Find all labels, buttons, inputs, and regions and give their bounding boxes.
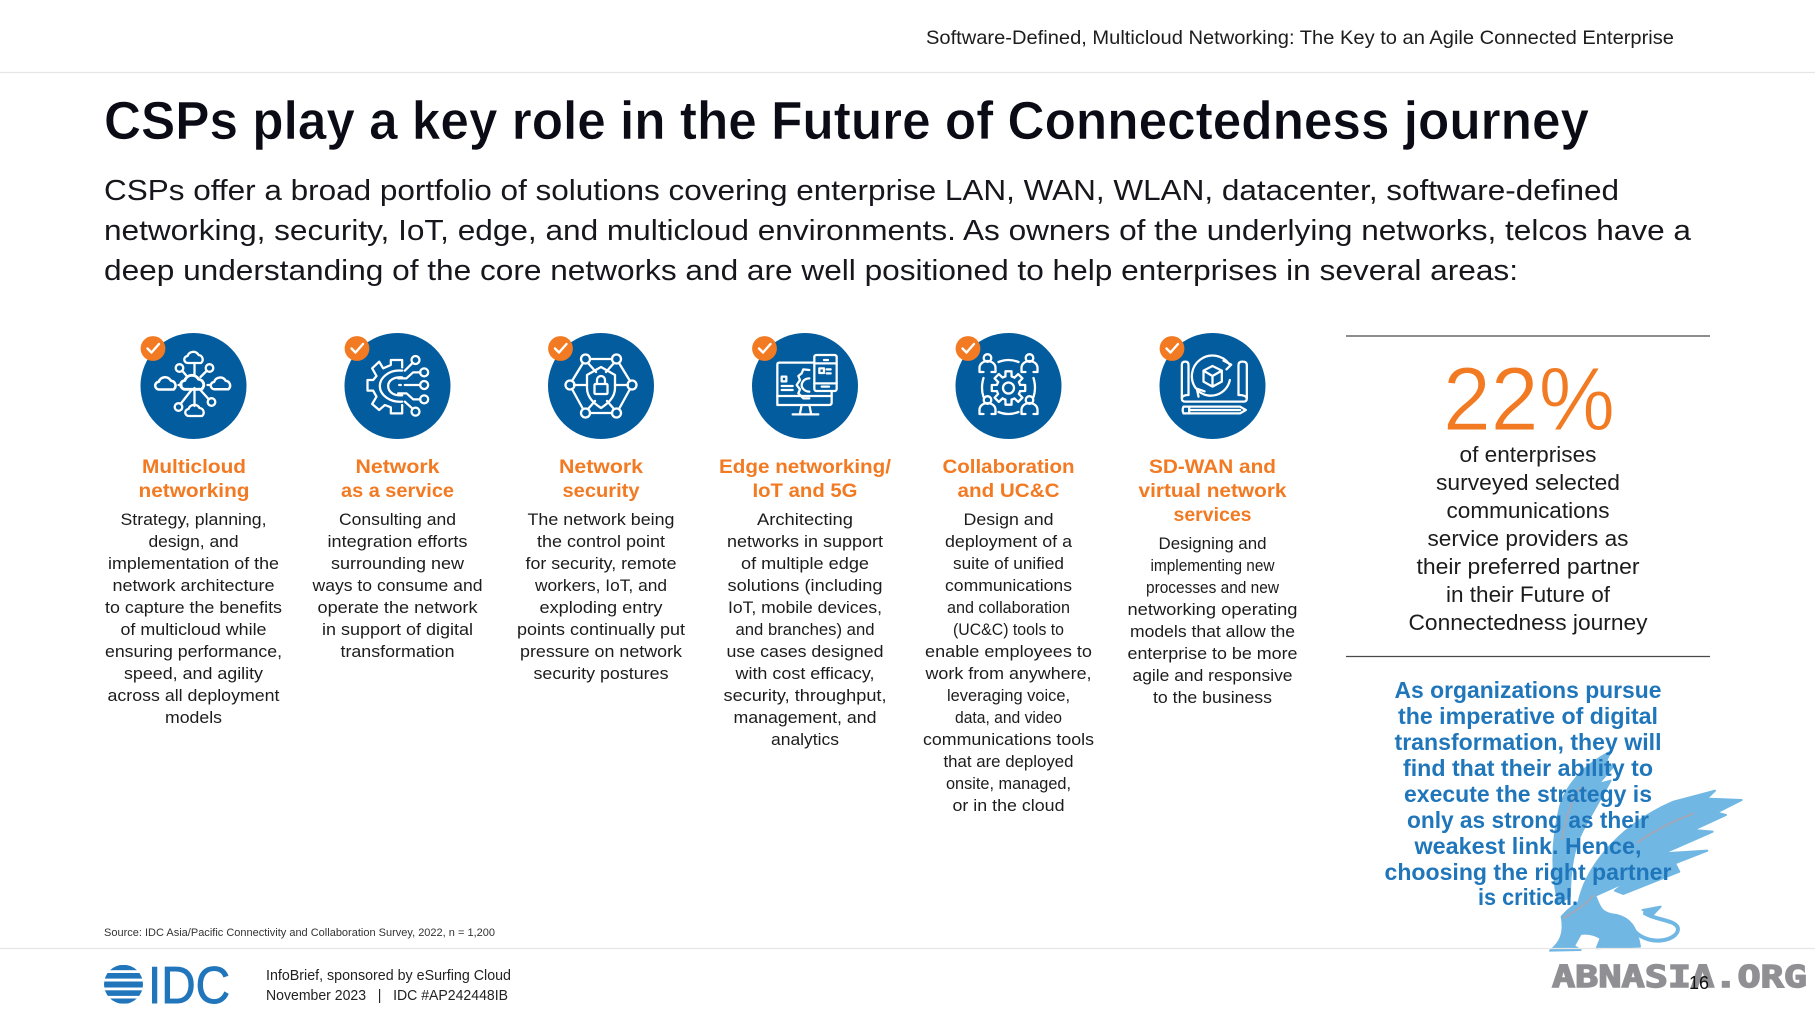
callout: partner advice: only as strong as their [1407,807,1649,833]
callout: partner advice: execute the strategy is [1404,781,1652,807]
description: with cost efficacy, [734,664,874,683]
heading [341,456,454,502]
description: The network being [528,510,674,529]
statistic caption: communications [1446,498,1610,523]
description: processes and new [1146,578,1280,597]
description: Designing and [1158,534,1266,553]
statistic caption [1408,442,1648,635]
statistic caption: their preferred partner [1416,554,1640,579]
page number: 16 [1689,973,1709,993]
intro paragraph: CSPs offer a broad portfolio of solutions covering enterprise LAN, WAN, WLAN, datacenter, software-defined [104,175,1619,207]
description [923,510,1094,815]
description [724,510,886,749]
icon: gear and circuit [344,333,450,439]
description: management, and [734,708,876,727]
heading [559,456,643,502]
description: for security, remote [526,554,676,573]
description: that are deployed [944,752,1074,771]
callout: partner advice [1384,677,1672,910]
description: enterprise to be more [1128,644,1298,663]
heading: Edge networking/ [719,456,892,478]
intro paragraph: deep understanding of the core networks and are well positioned to help enterprises in several areas: [104,255,1518,287]
description [517,510,685,683]
callout: partner advice: weakest link. Hence, [1414,833,1642,859]
description: in support of digital [322,620,473,639]
panel: edge networking [719,333,892,749]
description: agile and responsive [1132,666,1292,685]
IDC logo [104,965,229,1004]
description: surrounding new [331,554,465,573]
panel: 22 percent statistic [1346,336,1710,656]
description: pressure on network [520,642,683,661]
callout: partner advice: transformation, they will [1394,729,1662,755]
heading [942,456,1074,502]
icon: monitor and phone [752,333,858,439]
heading: Multicloud [142,456,246,478]
description: Strategy, planning, [120,510,266,529]
heading: security [562,480,640,502]
heading: services [1174,504,1252,526]
description: onsite, managed, [946,774,1071,793]
description: use cases designed [726,642,884,661]
description: of multicloud while [120,620,266,639]
heading [1138,456,1287,526]
description: network architecture [112,576,274,595]
description: (UC&C) tools to [953,620,1064,639]
description: communications [945,576,1072,595]
description: points continually put [517,620,685,639]
panel: multicloud networking [105,333,282,727]
description: enable employees to [925,642,1092,661]
description [1128,534,1298,707]
statistic caption: in their Future of [1446,582,1611,607]
callout: partner advice: is critical. [1478,884,1578,910]
description: the control point [537,532,665,551]
heading: IoT and 5G [752,480,858,502]
heading: and UC&C [958,480,1060,502]
statistic caption: surveyed selected [1436,470,1620,495]
description: speed, and agility [124,664,264,683]
panel: SD-WAN [1128,333,1298,707]
footer publication info [266,968,511,1004]
heading [138,456,250,502]
panel: collaboration [923,333,1094,815]
description: deployment of a [945,532,1073,551]
description: work from anywhere, [924,664,1092,683]
source note: Source: IDC Asia/Pacific Connectivity and Collaboration Survey, 2022, n = 1,200 [104,927,495,939]
callout: partner advice: find that their ability to [1403,755,1653,781]
description: to the business [1153,688,1272,707]
description: implementing new [1150,556,1275,575]
description: exploding entry [540,598,663,617]
description: operate the network [318,598,478,617]
description: to capture the benefits [105,598,282,617]
panel: network security [517,333,685,683]
description: transformation [340,642,454,661]
description: of multiple edge [741,554,869,573]
description: analytics [771,730,839,749]
IDC logo: IDC [148,957,230,1015]
description: across all deployment [108,686,280,705]
description: networking operating [1128,600,1298,619]
heading: as a service [341,480,454,502]
description: models [165,708,222,727]
description: solutions (including [728,576,882,595]
griffin watermark [1550,752,1742,951]
heading [719,456,892,502]
panel: network as a service [311,333,482,661]
description: design, and [148,532,238,551]
site watermark: ABNASIA.ORG [1552,960,1807,995]
heading: Network [356,456,440,478]
statistic value: 22% [1443,350,1615,450]
description: leveraging voice, [947,686,1070,705]
statistic caption: service providers as [1428,526,1628,551]
description: networks in support [727,532,883,551]
description: IoT, mobile devices, [728,598,882,617]
footer publication info: InfoBrief, sponsored by eSurfing Cloud [266,968,511,984]
description: and branches) and [736,620,874,639]
description: suite of unified [953,554,1064,573]
heading: virtual network [1138,480,1287,502]
description: communications tools [923,730,1094,749]
heading: Collaboration [942,456,1074,478]
description: Architecting [757,510,853,529]
description: or in the cloud [952,796,1064,815]
intro paragraph [104,175,1691,287]
icon: padlock shield network [548,333,654,439]
statistic caption: of enterprises [1460,442,1596,467]
description: security, throughput, [724,686,886,705]
description: models that allow the [1130,622,1295,641]
report running header: Software-Defined, Multicloud Networking: The Key to an Agile Connected Enterprise [926,27,1674,49]
callout: partner advice: the imperative of digital [1398,703,1658,729]
intro paragraph: networking, security, IoT, edge, and multicloud environments. As owners of the underlying networks, telcos have a [104,215,1691,247]
callout: partner advice: choosing the right partner [1384,859,1672,885]
heading: networking [138,480,250,502]
description: data, and video [955,708,1062,727]
description: and collaboration [947,598,1070,617]
description: workers, IoT, and [534,576,667,595]
icon: gear and people [956,333,1062,439]
description: ways to consume and [311,576,482,595]
callout: partner advice: As organizations pursue [1394,677,1662,703]
heading: Network [559,456,643,478]
statistic caption: Connectedness journey [1408,610,1648,635]
heading: SD-WAN and [1149,456,1276,478]
description: integration efforts [328,532,468,551]
icon: multicloud [140,333,246,439]
description [311,510,482,661]
description [105,510,282,727]
description: Consulting and [339,510,456,529]
footer publication info: November 2023 | IDC #AP242448IB [266,988,508,1004]
description: ensuring performance, [105,642,282,661]
icon: blueprint and cube [1160,333,1266,439]
title: CSPs play a key role in the Future of Connectedness journey [104,91,1589,151]
description: implementation of the [108,554,279,573]
description: security postures [534,664,668,683]
description: Design and [964,510,1054,529]
